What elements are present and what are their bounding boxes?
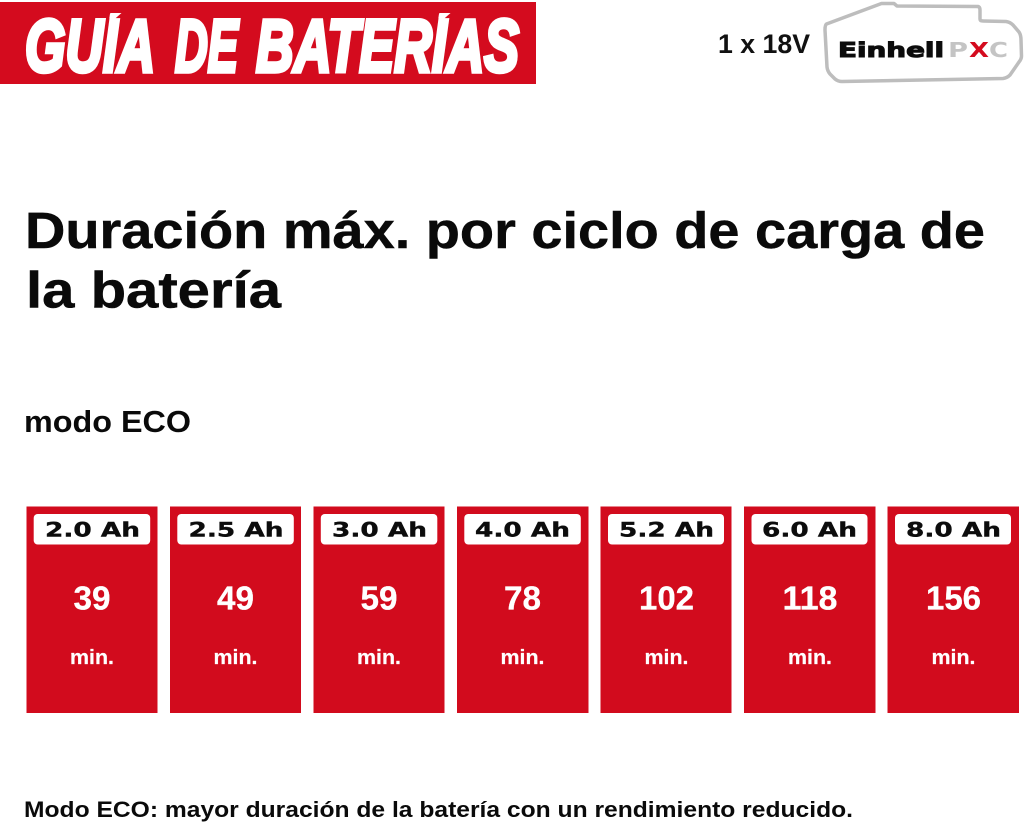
card: 4.0 Ah: 4.0 Ah [475,518,570,542]
icon: battery with Einhell PXC logo: C [989,38,1008,62]
card: 8.0 Ah: min. [932,646,976,669]
footnote: Modo ECO: mayor duración de la batería con un rendimiento reducido. [24,797,853,822]
card: 6.0 Ah: 6.0 Ah [762,518,857,542]
card: 4.0 Ah: 78 [504,580,541,616]
card: 6.0 Ah: min. [788,646,832,669]
card: 6.0 Ah: 118 [782,580,838,616]
card: 5.2 Ah: min. [644,646,688,669]
card: 2.0 Ah: 39 [74,580,110,616]
icon: battery with Einhell PXC logo [825,4,1022,82]
header banner [0,2,536,88]
icon: battery with Einhell PXC logo: Einhell [838,38,944,62]
header banner: DE [175,4,240,88]
card: 3.0 Ah: 59 [360,580,398,616]
card: 4.0 Ah [457,506,588,713]
card: 8.0 Ah [888,506,1019,713]
card: 3.0 Ah [314,506,444,713]
card: 3.0 Ah: min. [357,646,401,669]
title [25,202,985,318]
card: 5.2 Ah: 5.2 Ah [619,518,714,542]
card: 2.0 Ah: min. [70,646,114,669]
mode subheading: modo ECO [24,404,191,439]
title: Duración máx. por ciclo de carga de [25,202,985,259]
card: 5.2 Ah: 102 [639,580,694,616]
card: 3.0 Ah: 3.0 Ah [332,518,427,542]
header banner: GUÍA [25,4,155,88]
card: 4.0 Ah: min. [500,646,544,669]
card: 8.0 Ah: 8.0 Ah [906,518,1001,542]
card: 2.5 Ah: min. [214,646,258,669]
card: 2.5 Ah: 49 [217,580,254,616]
title: la batería [26,262,282,318]
card: 2.5 Ah: 2.5 Ah [188,518,284,542]
card: 2.5 Ah [170,506,301,713]
header banner: BATERÍAS [256,4,519,88]
voltage label: 1 x 18V [718,29,810,59]
card: 2.0 Ah: 2.0 Ah [45,518,140,542]
card: 8.0 Ah: 156 [926,580,981,616]
card: 2.0 Ah [26,506,158,713]
card: 6.0 Ah [744,506,876,713]
icon: battery with Einhell PXC logo: X [969,38,990,62]
card: 5.2 Ah [600,506,732,713]
icon: battery with Einhell PXC logo: P [948,38,968,62]
